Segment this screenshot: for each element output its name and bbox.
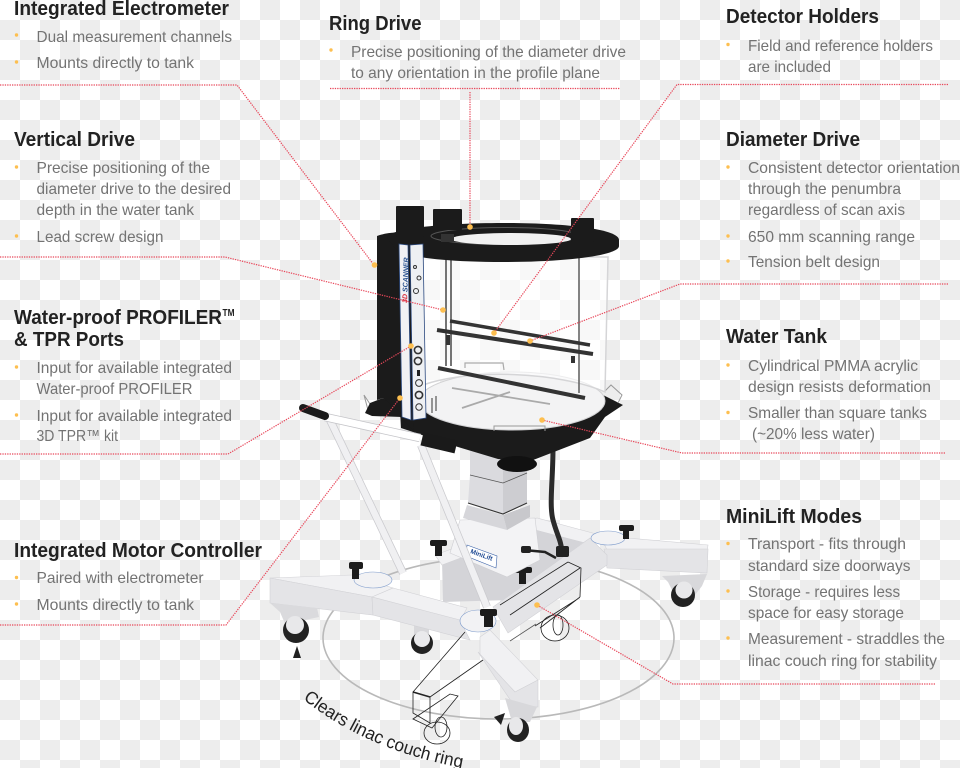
list: Consistent detector orientation [748, 160, 960, 177]
outline: right ghost arm [500, 562, 581, 641]
machine: handle and struts [303, 408, 487, 607]
machine: column [365, 233, 423, 430]
list: Precise positioning of the [36, 160, 210, 177]
caster left [270, 603, 319, 643]
node plates [354, 531, 625, 632]
outline: front ghost arm [413, 632, 483, 744]
list [726, 536, 945, 670]
front arm [478, 630, 538, 707]
leader lines [0, 84, 948, 684]
list [15, 570, 204, 614]
list [15, 360, 232, 445]
clamps [349, 525, 634, 627]
list: regardless of scan axis [748, 202, 905, 219]
machine: black tank base [400, 395, 623, 472]
list: to any orientation in the profile plane [351, 65, 600, 82]
list: Dual measurement channels [36, 29, 232, 46]
motor box: MiniLift [469, 548, 494, 563]
machine: ring [387, 223, 619, 262]
right arm [600, 535, 708, 573]
list: linac couch ring for stability [748, 653, 937, 670]
heading [14, 307, 234, 351]
panel: Water-proof PROFILER and TPR Ports [14, 307, 234, 445]
black cable [551, 448, 562, 552]
rear caster [411, 624, 433, 654]
left arm [270, 575, 393, 615]
list: Storage - requires less [748, 584, 900, 601]
machine: tank floor [364, 372, 622, 431]
panel: Detector Holders [726, 6, 933, 76]
list: standard size doorways [748, 558, 910, 575]
list: Input for available integrated [36, 408, 232, 425]
machine: rods [446, 258, 579, 393]
list: diameter drive to the desired [36, 181, 231, 198]
list: 650 mm scanning range [748, 229, 915, 246]
list: Measurement - straddles the [748, 631, 945, 648]
machine: scanner panels [399, 244, 426, 420]
caster right [662, 574, 707, 607]
list: are included [748, 59, 831, 76]
machine: detector blocks [396, 206, 594, 242]
panel: Diameter Drive [726, 129, 960, 271]
panel: Ring Drive [329, 13, 626, 82]
heading: TM [222, 308, 234, 319]
list: through the penumbra [748, 181, 901, 198]
machine: scanner panels: 3D SCANNER [402, 257, 411, 303]
heading: & TPR Ports [14, 329, 124, 351]
list: Precise positioning of the diameter drive [351, 44, 626, 61]
heading: Detector Holders [726, 6, 879, 28]
list: Tension belt design [748, 254, 880, 271]
list [726, 358, 931, 443]
list: space for easy storage [748, 605, 904, 622]
heading: Ring Drive [329, 13, 422, 35]
list [726, 38, 933, 76]
list: Paired with electrometer [36, 570, 204, 587]
heading: Water-proof PROFILER [14, 307, 223, 329]
list: depth in the water tank [36, 202, 195, 219]
heading: Water Tank [726, 326, 828, 348]
list: Water-proof PROFILER [36, 381, 192, 398]
callout dots [372, 224, 545, 608]
machine: diameter drive bars [437, 321, 593, 398]
panel: Vertical Drive [14, 129, 231, 246]
list: 3D TPR™ kit [36, 428, 118, 445]
heading: Vertical Drive [14, 129, 135, 151]
caster front [505, 698, 537, 742]
list: Mounts directly to tank [36, 597, 195, 614]
list: Smaller than square tanks [748, 405, 927, 422]
panel: Water Tank [726, 326, 931, 443]
panel: Integrated Motor Controller [14, 540, 262, 614]
list: Input for available integrated [36, 360, 232, 377]
machine: MiniLift base [270, 448, 708, 742]
list [15, 29, 232, 72]
list: design resists deformation [748, 379, 931, 396]
list [329, 44, 626, 82]
machine: glass tank wall [423, 257, 608, 392]
list: Cylindrical PMMA acrylic [748, 358, 918, 375]
list: Mounts directly to tank [36, 55, 195, 72]
list: (~20% less water) [752, 426, 875, 443]
list: Lead screw design [36, 229, 164, 246]
list [15, 160, 231, 246]
lift column [463, 450, 530, 530]
heading: Integrated Motor Controller [14, 540, 262, 562]
motor box [450, 518, 540, 577]
panel: MiniLift Modes [726, 506, 945, 670]
front beam [372, 588, 470, 640]
list: Transport - fits through [748, 536, 906, 553]
couch ring ellipse [323, 557, 674, 719]
list: Field and reference holders [748, 38, 933, 55]
panel: Integrated Electrometer [14, 0, 232, 72]
heading: Diameter Drive [726, 129, 860, 151]
back right beam [493, 538, 607, 633]
heading: MiniLift Modes [726, 506, 862, 528]
arrowheads [293, 646, 505, 725]
list [726, 160, 960, 271]
